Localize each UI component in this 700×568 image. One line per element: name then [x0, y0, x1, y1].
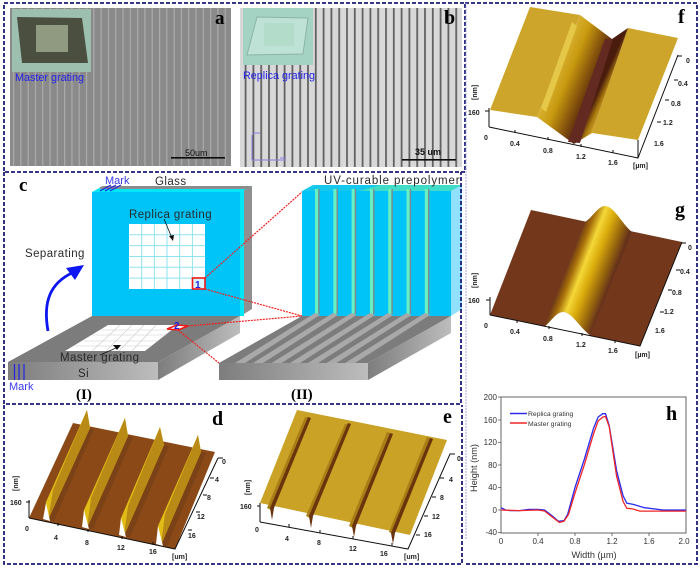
prepolymer face: [302, 191, 451, 316]
axes: 1.6: [654, 141, 664, 148]
axes: 12: [117, 545, 125, 552]
photo inset: replica grating glass: [243, 8, 313, 65]
axes: 16: [380, 551, 388, 558]
ridges: [44, 410, 206, 546]
marker 2: [167, 321, 188, 332]
axes: [um]: [172, 554, 187, 561]
base front: [219, 363, 368, 380]
label (II): (II): [291, 387, 313, 403]
label: prepolymer: UV-curable prepolymer: [324, 175, 461, 187]
trench floor: [568, 39, 613, 143]
scale bar 50um: [171, 148, 225, 159]
axes: 0.4: [678, 81, 688, 88]
axes: 0.8: [671, 101, 681, 108]
label: separating: Separating: [25, 248, 85, 260]
legend: [510, 411, 574, 428]
x axis title: Width (µm): [571, 550, 617, 560]
replica ridges: [315, 189, 429, 314]
axes: 12: [197, 514, 205, 521]
trench left slope: [537, 15, 612, 144]
axes: 16: [188, 533, 196, 540]
legend: Replica grating: [528, 411, 574, 418]
white front section of ridge: [544, 312, 590, 335]
axes: 1.6: [608, 160, 618, 167]
axes: [µm]: [635, 352, 650, 359]
marks on glass: [100, 175, 130, 191]
ridge: [544, 206, 632, 335]
panel b: replica grating micrograph: [240, 7, 462, 167]
y axis values: -40: [485, 528, 498, 537]
axes: 8: [440, 495, 444, 502]
surface: [29, 423, 215, 549]
panel letter d: d: [212, 408, 223, 430]
axes: [240, 454, 461, 561]
marker 1: 1: [195, 280, 201, 291]
x axis values: 0.8: [569, 537, 581, 546]
panel a: master grating micrograph: [10, 8, 231, 166]
axes: 160: [468, 298, 480, 305]
y axis values: 0: [493, 506, 498, 515]
prepolymer top: [302, 185, 462, 191]
axes: 4: [285, 536, 289, 543]
base side: [368, 316, 451, 380]
x axis values: 0: [499, 537, 504, 546]
axes: [nm]: [472, 273, 479, 288]
marker 2: 2: [174, 321, 180, 332]
axes: 4: [449, 477, 453, 484]
label: master grating with arrow: Master grating: [60, 352, 139, 364]
axes: 160: [240, 504, 252, 511]
label: replica grating with arrow: Replica grating: [129, 209, 212, 221]
axes: 0.4: [510, 329, 520, 336]
glass top edge: [92, 186, 252, 192]
y axis values: 80: [488, 461, 498, 470]
axes: 0.4: [510, 141, 520, 148]
axes: [10, 458, 226, 561]
axes: 8: [85, 540, 89, 547]
caption: master grating: Master grating: [15, 72, 84, 84]
front cross-section notches: [43, 503, 163, 546]
y axis values: 40: [488, 483, 498, 492]
panel letter g: g: [675, 199, 685, 221]
axes: [468, 242, 692, 359]
glass face: [92, 192, 240, 316]
label (I): (I): [76, 387, 92, 403]
axes: 160: [10, 500, 22, 507]
panel letter c: c: [19, 175, 27, 196]
faint axis mark: [252, 133, 286, 160]
panel letter f: f: [678, 6, 685, 28]
axes: 16: [424, 532, 432, 539]
label: silicon: Si: [78, 368, 89, 380]
plot frame: [501, 397, 686, 533]
x axis values: 1.2: [606, 537, 618, 546]
axes: 0: [255, 527, 259, 534]
axes: [nm]: [245, 480, 252, 495]
panel letter h: h: [666, 403, 677, 425]
axes: 1.2: [664, 309, 674, 316]
trench right slope: [574, 28, 628, 144]
axes: 160: [468, 110, 480, 117]
label: replica grating with arrow: [129, 209, 212, 241]
axes: 0.8: [543, 148, 553, 155]
schematic (I): glass replica over silicon master: [8, 175, 252, 403]
axes: [nm]: [472, 85, 479, 100]
axes: 0: [25, 526, 29, 533]
silicon base side: [158, 316, 240, 380]
scale bar 35 um: [402, 147, 456, 161]
bright edge highlight: [541, 22, 577, 112]
x axis values: 2.0: [678, 537, 690, 546]
panel letter b: b: [444, 7, 455, 29]
marks on glass: Mark: [105, 175, 130, 187]
panel letter a: a: [215, 8, 225, 29]
master grating grid: [65, 325, 178, 351]
x axis values: 1.6: [643, 537, 655, 546]
scale bar 35 um: 35 um: [415, 147, 441, 157]
axes: 0.8: [672, 290, 682, 297]
y axis values: 120: [484, 438, 498, 447]
grooves: [270, 417, 433, 544]
axes: 1.2: [576, 342, 586, 349]
photo inset: master grating chip: [12, 9, 91, 72]
axes: [468, 55, 690, 170]
glass side: [244, 186, 252, 314]
y axis values: 160: [484, 416, 498, 425]
panel e: AFM replica grating large area: [240, 406, 461, 561]
panel d: AFM master grating large area: [10, 408, 226, 561]
axes: 0: [484, 323, 488, 330]
axes: 8: [207, 495, 211, 502]
panel f: AFM master grating trench: [468, 6, 690, 170]
axes: [um]: [404, 554, 419, 561]
panel g: AFM replica grating ridge: [468, 199, 692, 359]
axes: 0: [484, 135, 488, 142]
panel h: height profile chart: [469, 393, 690, 560]
replica curve: [501, 414, 686, 521]
legend: Master grating: [528, 421, 572, 428]
axes: 1.6: [655, 328, 665, 335]
axes: 0: [457, 456, 461, 463]
replica grating grid: [129, 224, 205, 289]
panel c: separating schematic: [8, 175, 462, 403]
ticks: [498, 397, 649, 536]
axes: 16: [149, 549, 157, 556]
axes: 0: [686, 58, 690, 65]
axes: 1.2: [576, 154, 586, 161]
surface: [490, 210, 682, 346]
marker 1: [192, 278, 205, 291]
scale bar 50um: 50um: [185, 148, 208, 158]
axes: 4: [54, 535, 58, 542]
label: master grating with arrow: [60, 345, 139, 364]
axes: 1.2: [663, 120, 673, 127]
y axis title: Height (nm): [469, 444, 479, 492]
axes: 1.6: [608, 348, 618, 355]
marks on silicon: Mark: [9, 381, 34, 393]
axes: 0.4: [680, 269, 690, 276]
master curve: [501, 416, 686, 522]
axes: 0: [222, 459, 226, 466]
prepolymer side: [451, 185, 462, 316]
axes: 8: [317, 540, 321, 547]
axes: [nm]: [13, 476, 20, 491]
silicon base top: [8, 316, 240, 362]
caption: replica grating: Replica grating: [243, 70, 315, 82]
axes: 4: [215, 477, 219, 484]
master ridges: [235, 313, 430, 363]
label: glass: Glass: [155, 176, 186, 188]
surface right: [592, 28, 678, 140]
y axis values: 200: [484, 393, 498, 402]
axes: 12: [432, 514, 440, 521]
silicon base front: [8, 362, 158, 380]
x axis values: [499, 537, 690, 546]
surface: [260, 410, 447, 535]
groove shading: [267, 417, 430, 534]
marks on silicon: [9, 364, 34, 393]
axes: 0.8: [543, 336, 553, 343]
zoom connector lines: [178, 192, 302, 363]
axes: 0: [688, 245, 692, 252]
axes: [µm]: [633, 163, 648, 170]
axes: 12: [349, 546, 357, 553]
x axis values: 0.4: [532, 537, 544, 546]
surface left: [490, 7, 580, 117]
panel letter e: e: [443, 406, 452, 428]
schematic (II): enlarged grating cross-section: [219, 175, 462, 403]
base top: [219, 316, 451, 363]
arrow: separating direction: [46, 265, 84, 331]
y axis values: [484, 393, 498, 537]
